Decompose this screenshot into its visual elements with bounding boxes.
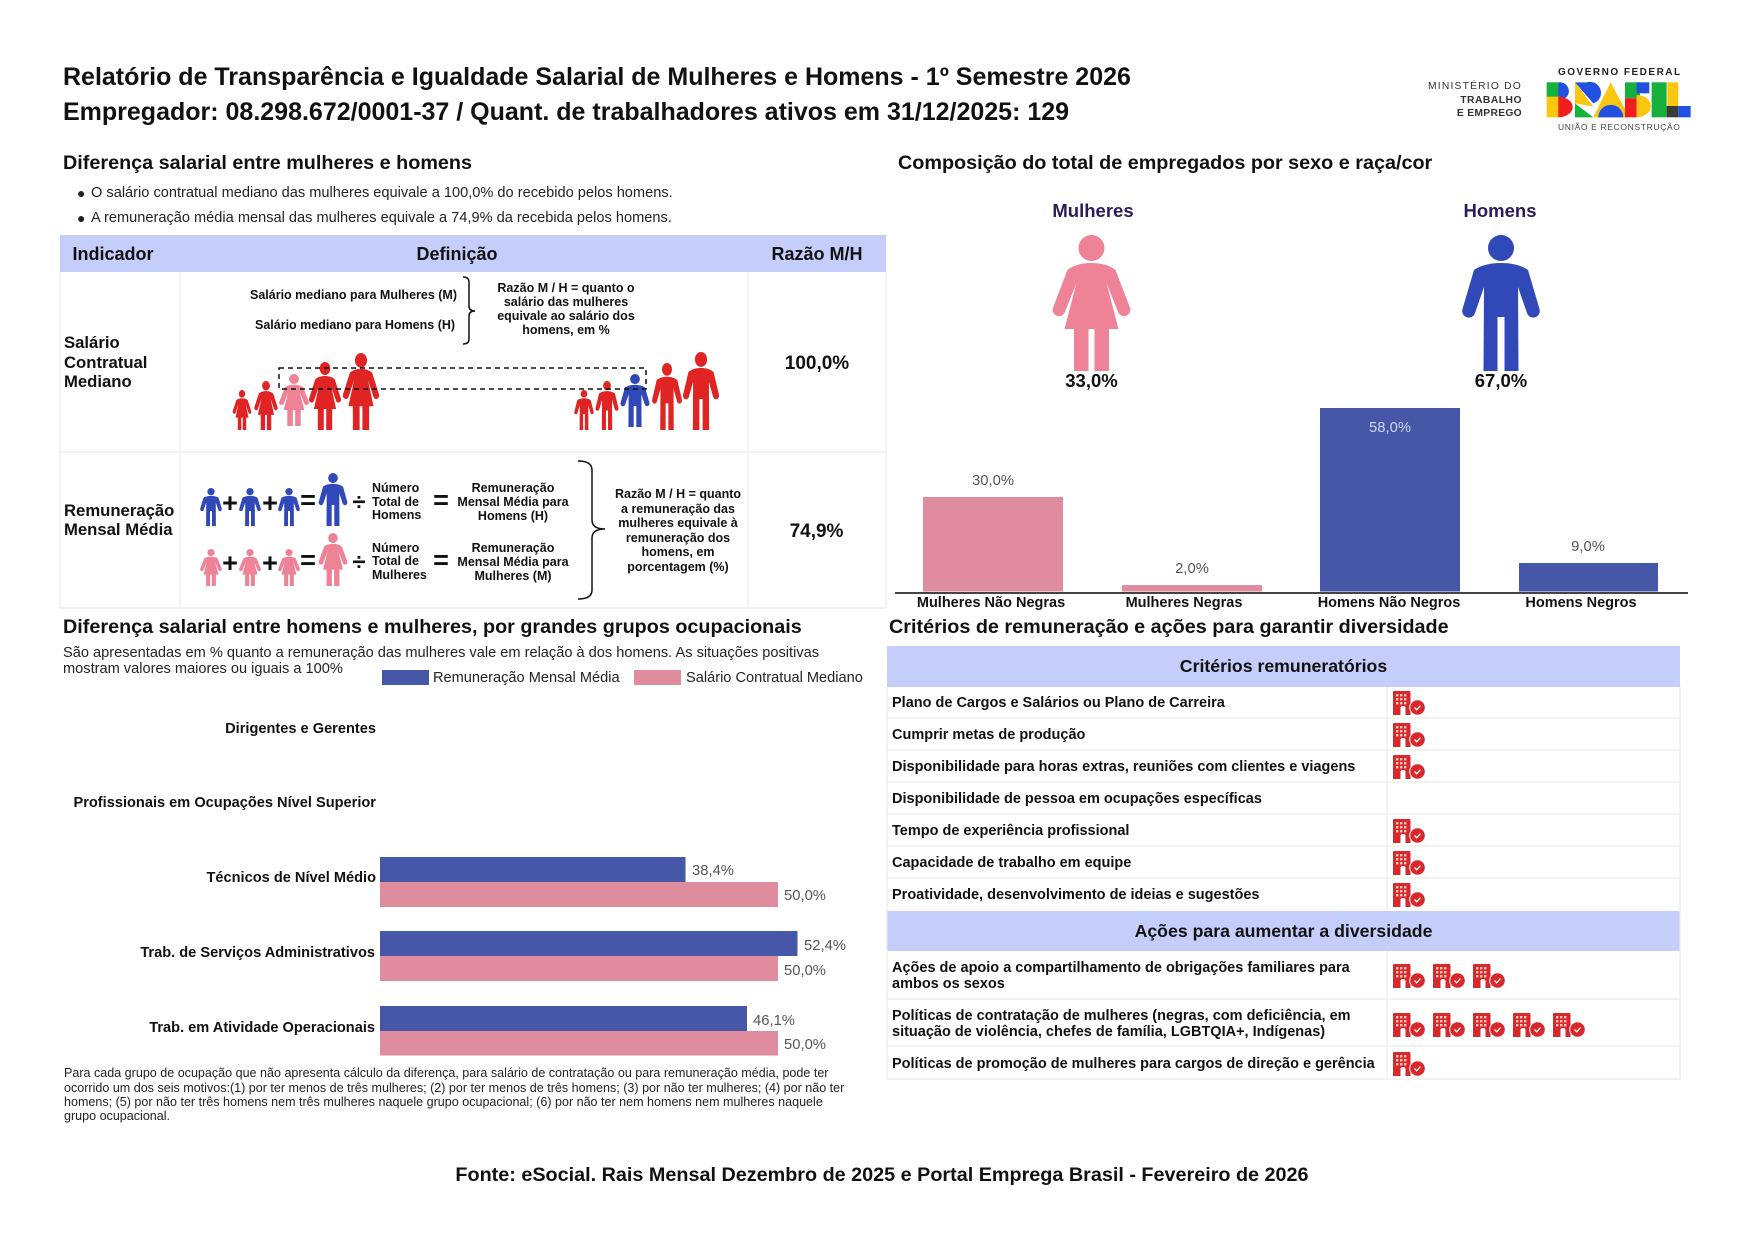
bar chart: composição por sexo e raça/cor: Homens Não Negros [1318,595,1460,611]
brace and ratio definition: mulheres equivale à [618,516,738,530]
bar chart: grupos ocupacionais: 46,1% [753,1013,795,1029]
icons: mulheres em ordem de salário [233,353,379,430]
formula: homens: Total de [372,495,419,509]
definition: salário mediano: Salário mediano para Homens (H) [255,318,455,332]
table header: Indicador [72,244,154,264]
title: Empregador: 08.298.672/0001-37 / Quant. de trabalhadores ativos em 31/12/2025: 129 [63,98,1069,126]
bar chart: grupos ocupacionais: Dirigentes e Gerentes [225,721,376,737]
definition: salário mediano: salário das mulheres [504,295,628,309]
formula: homens: = [300,485,316,515]
formula: mulheres: + [262,548,278,578]
formula: mulheres: Mulheres [372,568,427,582]
formula: homens: + [222,488,238,518]
logo: ministério e governo federal: E EMPREGO [1457,108,1522,119]
formula: homens: Homens (H) [478,509,548,523]
formula: homens: Remuneração [472,481,555,495]
description [63,645,819,677]
logo: ministério e governo federal: TRABALHO [1460,95,1522,106]
formula: homens: Número [372,481,420,495]
definition: salário mediano: Salário mediano para Mulheres (M) [250,288,457,302]
brace and ratio definition: homens, em [642,545,714,559]
bar chart: grupos ocupacionais: 50,0% [784,888,826,904]
legend: Salário Contratual Mediano [686,670,863,686]
row label: remuneração mensal média: Remuneração [64,501,174,520]
formula: homens: + [262,488,278,518]
row label: salário contratual mediano: Mediano [64,372,132,391]
formula: homens [200,473,570,526]
panel: tabela de indicadores [60,235,886,608]
legend: Remuneração Mensal Média [433,670,620,686]
logo: ministério e governo federal [1428,67,1691,132]
bullet list: ● [77,210,85,226]
panel: mulheres [1052,200,1134,391]
row label: remuneração mensal média: Mensal Média [64,520,173,539]
mediana: retângulo tracejado [279,368,646,389]
bar chart: composição por sexo e raça/cor: 2,0% [1175,561,1209,577]
title [63,63,1131,126]
definition: salário mediano: Razão M / H = quanto o [497,281,635,295]
rows: critérios: Capacidade de trabalho em equipe [892,855,1131,871]
brace and ratio definition [578,461,741,599]
footnote: homens; (5) por não ter três homens nem três mulheres naquele grupo ocupacional; (6) por não ter nem homens nem mulheres naquele [64,1095,823,1109]
bar chart: composição por sexo e raça/cor: Homens Negros [1525,595,1637,611]
icons: empresas que adotam ações [1393,964,1586,1077]
formula: mulheres: + [222,548,238,578]
formula: mulheres: Número [372,541,420,555]
row label: salário contratual mediano: Salário [64,333,120,352]
rows: ações: ambos os sexos [892,976,1005,992]
bar chart: grupos ocupacionais: Técnicos de Nível Médio [206,870,376,886]
formula: homens: ÷ [352,489,366,516]
row label: salário contratual mediano: Contratual [64,353,147,372]
rows: critérios [892,695,1355,903]
source: Fonte: eSocial. Rais Mensal Dezembro de 2025 e Portal Emprega Brasil - Fevereiro de 2026 [455,1164,1309,1186]
table header: Razão M/H [771,244,863,264]
bullet list: A remuneração média mensal das mulheres equivale a 74,9% da recebida pelos homens. [91,210,672,226]
footnote: ocorrido um dos seis motivos:(1) por ter menos de três mulheres; (2) por ter menos de três homens; (3) por não ter mulheres; (4) por não ter [64,1081,844,1095]
footnote: grupo ocupacional. [64,1109,170,1123]
bar chart: grupos ocupacionais: Profissionais em Ocupações Nível Superior [73,795,376,811]
bar chart: composição por sexo e raça/cor: 58,0% [1369,420,1411,436]
brace and ratio definition: Razão M / H = quanto [615,487,741,501]
row label: salário contratual mediano [64,333,147,391]
rows: ações [892,960,1376,1072]
formula: mulheres: Total de [372,554,419,568]
rows: critérios: Plano de Cargos e Salários ou Plano de Carreira [892,695,1226,711]
logo: ministério e governo federal: GOVERNO FEDERAL [1558,67,1682,78]
definition: salário mediano: homens, em % [522,323,610,337]
panel: homens [1462,200,1540,391]
formula: mulheres: ÷ [352,549,366,576]
footnote [64,1066,844,1123]
description: mostram valores maiores ou iguais a 100% [63,661,343,677]
formula: homens: Mensal Média para [457,495,570,509]
bar chart: composição por sexo e raça/cor: Mulheres Negras [1126,595,1242,611]
formula: mulheres [200,533,570,586]
heading: grupos ocupacionais: Diferença salarial entre homens e mulheres, por grandes grupos ocupacionais [63,616,802,638]
title: Relatório de Transparência e Igualdade Salarial de Mulheres e Homens - 1º Semestre 2026 [63,63,1131,91]
brace and ratio definition: a remuneração das [621,502,735,516]
brace and ratio definition: porcentagem (%) [627,560,729,574]
rows: ações: Ações de apoio a compartilhamento de obrigações familiares para [892,960,1351,976]
formula: mulheres: Mulheres (M) [474,569,552,583]
heading: critérios: Critérios de remuneração e ações para garantir diversidade [889,616,1449,638]
bar chart: grupos ocupacionais: Trab. em Atividade Operacionais [149,1020,375,1036]
rows: critérios: Disponibilidade para horas extras, reuniões com clientes e viagens [892,759,1355,775]
header: ações: Ações para aumentar a diversidade [1135,921,1433,941]
bar chart: composição por sexo e raça/cor [895,408,1688,611]
rows: ações: Políticas de promoção de mulheres para cargos de direção e gerência [892,1056,1376,1072]
value: salário contratual: 100,0% [785,353,849,374]
logo: ministério e governo federal: MINISTÉRIO DO [1428,79,1522,92]
bar chart: grupos ocupacionais: Trab. de Serviços Administrativos [140,945,375,961]
icons: homens em ordem de salário [574,352,719,430]
description: São apresentadas em % quanto a remuneração das mulheres vale em relação à dos homens. As situações positivas [63,645,819,661]
rows: ações: Políticas de contratação de mulheres (negras, com deficiência, em [892,1008,1351,1024]
rows: critérios: Cumprir metas de produção [892,727,1086,743]
rows: ações: situação de violência, chefes de família, LGBTQIA+, Indígenas) [892,1024,1325,1040]
rows: critérios: Proatividade, desenvolvimento de ideias e sugestões [892,887,1259,903]
bar chart: composição por sexo e raça/cor: 9,0% [1571,539,1605,555]
bar chart: grupos ocupacionais [73,721,846,1056]
formula: homens: = [433,485,449,515]
definition: salário mediano: equivale ao salário dos [497,309,635,323]
panel: mulheres: 33,0% [1065,370,1118,391]
legend [382,670,863,686]
bar chart: grupos ocupacionais: 50,0% [784,963,826,979]
bar chart: grupos ocupacionais: 50,0% [784,1037,826,1053]
panel: tabela de critérios [887,646,1680,1079]
bullet list: ● [77,185,85,201]
value: remuneração média: 74,9% [790,521,844,542]
formula: mulheres: Remuneração [472,541,555,555]
table header: Definição [416,244,498,264]
bullet list: O salário contratual mediano das mulheres equivale a 100,0% do recebido pelos homens. [91,185,673,201]
bar chart: grupos ocupacionais: 52,4% [804,938,846,954]
row label: remuneração mensal média [64,501,174,539]
rows: critérios: Tempo de experiência profissional [892,823,1129,839]
logo: ministério e governo federal: UNIÃO E RECONSTRUÇÃO [1558,122,1681,132]
header: critérios remuneratórios: Critérios remuneratórios [1180,656,1387,676]
rows: critérios: Disponibilidade de pessoa em ocupações específicas [892,791,1262,807]
heading: diferença salarial: Diferença salarial entre mulheres e homens [63,152,472,174]
bullet list [77,185,673,226]
formula: homens: Homens [372,508,421,522]
bar chart: composição por sexo e raça/cor: Mulheres Não Negras [917,595,1065,611]
formula: mulheres: Mensal Média para [457,555,570,569]
table header [72,244,863,264]
brace and ratio definition: remuneração dos [626,531,730,545]
bar chart: grupos ocupacionais: 38,4% [692,863,734,879]
panel: homens: 67,0% [1475,370,1527,391]
panel: mulheres: Mulheres [1052,200,1134,221]
panel: homens: Homens [1464,200,1536,221]
bar chart: composição por sexo e raça/cor: 30,0% [972,473,1014,489]
formula: mulheres: = [300,545,316,575]
heading: composição: Composição do total de empregados por sexo e raça/cor [898,152,1433,174]
footnote: Para cada grupo de ocupação que não apresenta cálculo da diferença, para salário de contratação ou para remuneração média, pode ter [64,1066,828,1080]
definition: salário mediano [250,277,635,344]
icons: empresas que adotam critérios [1393,691,1426,908]
formula: mulheres: = [433,545,449,575]
